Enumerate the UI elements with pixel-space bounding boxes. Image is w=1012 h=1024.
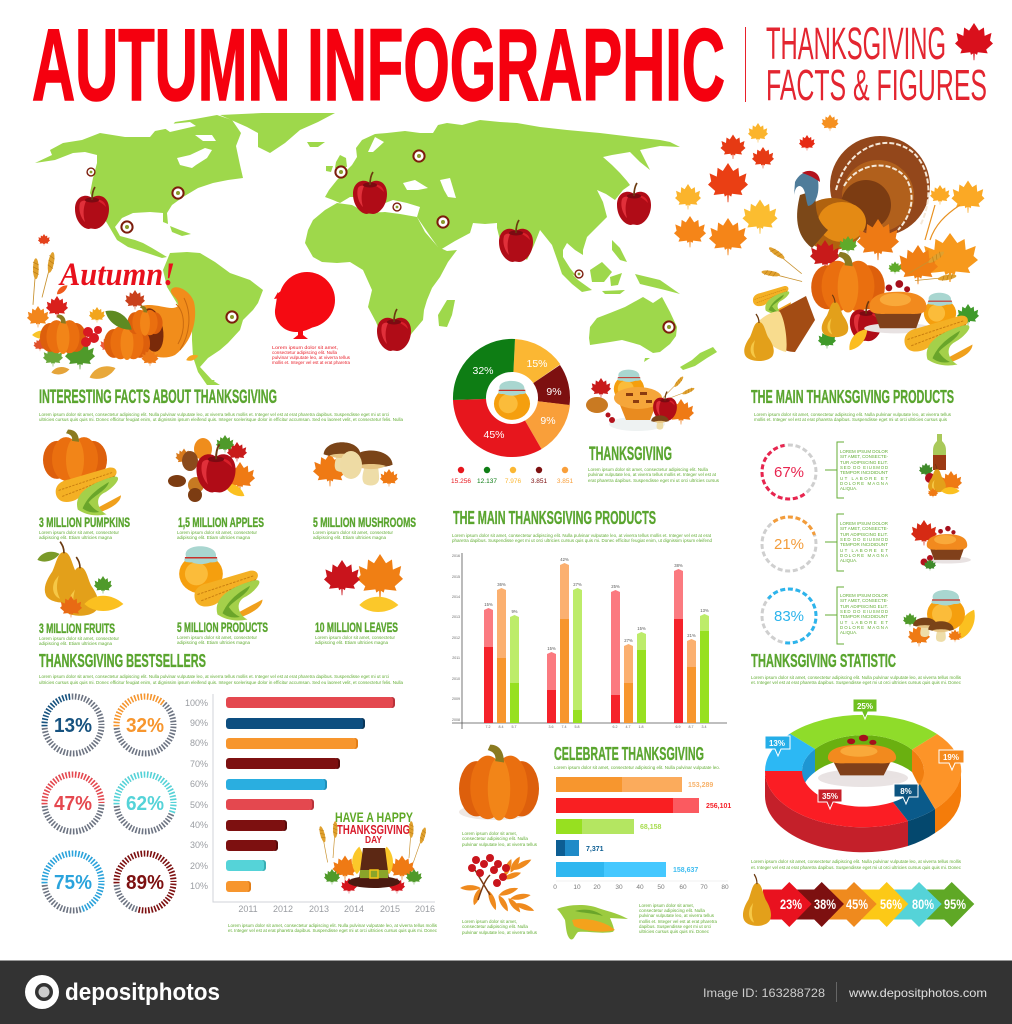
happy thanksgiving badge [318, 809, 427, 894]
celebrate bar chart: 30 [615, 884, 623, 891]
heading: bestsellers [39, 651, 403, 685]
dial 47%: 47% [54, 793, 92, 815]
fact: leaves [315, 554, 403, 645]
vertical bar chart: 2013 [452, 615, 460, 619]
fact: apples: 1,5 MILLION APPLES [178, 515, 264, 530]
subtitle [746, 18, 993, 110]
dial 13% [42, 694, 104, 756]
donut chart [453, 339, 570, 457]
vertical bar chart: 38% [674, 563, 683, 568]
arrow percentage strip: 80% [912, 896, 934, 912]
horizontal bar chart: 30% [190, 840, 208, 850]
arrow percentage strip: 23% [780, 896, 802, 912]
heading: celebrate: Lorem ipsum dolor sit amet, consectetur adipiscing elit. Nulla pulvinar vulputate leo. [554, 765, 720, 770]
autumn cornucopia: Autumn! [58, 257, 175, 293]
product row 83%: LOREM IPSUM DOLOR [840, 593, 888, 598]
callout 13% [765, 736, 790, 756]
fact: mushrooms: Lorem ipsum dolor sit amet, consectetur [313, 530, 393, 535]
fact: fruits [36, 542, 123, 646]
product row 83%: SED DO EIUSMOD [840, 609, 888, 614]
heading: interesting facts: ultricies cursus quis quis mi. Donec efficitur feugiat enim, ut dignissim ipsum eleifend quis. Integer scelerisque dolor in efficitur accumsan. Sed eu laoreet velit, et consectetur felis. Nulla [39, 417, 403, 422]
fact: pumpkins: 3 MILLION PUMPKINS [39, 515, 130, 530]
horizontal bar chart: 70% [190, 759, 208, 769]
callout 25%: 25% [857, 702, 873, 711]
heading: main products right: Lorem ipsum dolor sit amet, consectetur adipiscing elit. Nulla pulvinar vulputate leo, at viverra tellus [754, 412, 952, 417]
happy thanksgiving badge: DAY [365, 835, 382, 846]
heading: statistic: THANKSGIVING STATISTIC [751, 651, 896, 671]
rowan branch [460, 854, 538, 935]
vertical bar chart: 3.6 [548, 725, 554, 729]
fact: mushrooms [313, 442, 416, 540]
heading: main products center [452, 508, 712, 543]
horizontal bar chart: 20% [190, 861, 208, 871]
rowan branch: Lorem ipsum dolor sit amet, [462, 919, 517, 924]
callout 13%: 13% [769, 739, 785, 748]
map note: consectetur adipiscing elit. Nulla [272, 350, 337, 355]
celebrate pumpkin: consectetur adipiscing elit. Nulla [462, 836, 528, 841]
donut legend: 3.851 [557, 478, 574, 485]
callout 8%: 8% [900, 787, 912, 796]
fact: leaves: Lorem ipsum dolor sit amet, consectetur [315, 635, 395, 640]
celebrate bar chart: 7,371 [586, 846, 604, 853]
celebrate bar chart: 80 [721, 884, 729, 891]
arrow percentage strip: 95% [944, 896, 966, 912]
horizontal bar chart: 10% [190, 881, 208, 891]
dial 89%: 89% [126, 872, 164, 894]
product row 21% [751, 506, 971, 582]
rowan branch: consectetur adipiscing elit. Nulla [462, 924, 528, 929]
corn and note: consectetur adipiscing elit. Nulla [639, 908, 705, 913]
corn and note: pulvinar vulputate leo, at viverra tellus [639, 913, 715, 918]
vertical bar chart: 2010 [452, 677, 460, 681]
arrow percentage strip [743, 874, 974, 927]
celebrate pumpkin: pulvinar vulputate leo, at viverra tellus [462, 842, 538, 847]
vertical bar chart: 36% [497, 582, 506, 587]
heading: statistic: et. Integer vel est at erat pharetra dapibus. Suspendisse eget mi ut orci ultricies cursus quis quis mi. Donec [751, 680, 962, 685]
product row 21%: TEMPOR INCIDIDUNT [840, 542, 888, 547]
fact: products: 5 MILLION PRODUCTS [177, 620, 268, 635]
horizontal bar chart [185, 694, 435, 914]
horizontal bar chart: 90% [190, 718, 208, 728]
dial 47% [42, 772, 104, 834]
vertical bar chart: 2015 [452, 575, 460, 579]
vertical bar chart: 7.2 [486, 725, 490, 729]
callout 8% [894, 784, 918, 804]
footer bar: Image ID: 163288728 [703, 986, 825, 1000]
product row 21%: SED DO EIUSMOD [840, 537, 888, 542]
arrow percentage strip: 56% [880, 896, 902, 912]
callout 19%: 19% [943, 753, 959, 762]
callout 19% [939, 750, 964, 770]
fact: leaves: 10 MILLION LEAVES [315, 620, 398, 635]
product row 67%: LOREM IPSUM DOLOR [840, 449, 888, 454]
vertical bar chart: 9% [511, 609, 518, 614]
fact: fruits: Lorem ipsum dolor sit amet, consectetur [39, 636, 119, 641]
celebrate bar chart: 153,289 [688, 782, 713, 789]
product row 83%: UT LABORE ET [840, 620, 888, 625]
dial 62%: 62% [126, 793, 164, 815]
vertical bar chart: 27% [573, 582, 582, 587]
bar chart note [228, 923, 438, 933]
happy thanksgiving badge: HAVE A HAPPY [335, 809, 413, 825]
map note [272, 345, 351, 365]
arrow percentage strip: 45% [846, 896, 868, 912]
vertical bar chart: 13% [700, 608, 709, 613]
dial 75%: 75% [54, 872, 92, 894]
heading: statistic [751, 651, 962, 685]
thanksgiving text: Lorem ipsum dolor sit amet, consectetur adipiscing elit. Nulla [588, 467, 708, 472]
celebrate bar chart: 10 [573, 884, 581, 891]
product row 83%: DOLORE MAGNA [840, 625, 888, 630]
vertical bar chart: 2011 [452, 656, 460, 660]
heading: celebrate: CELEBRATE THANKSGIVING [554, 744, 704, 764]
product row 67%: TEMPOR INCIDIDUNT [840, 470, 888, 475]
map note: mollis et. Integer vel est at erat pharetra [272, 360, 350, 365]
horizontal bar chart: 2011 [238, 904, 258, 914]
product row 83%: TEMPOR INCIDIDUNT [840, 614, 888, 619]
horizontal bar chart: 60% [190, 779, 208, 789]
vertical bar chart: 21% [687, 633, 696, 638]
callout 35% [818, 789, 842, 809]
product row 21%: DOLORE MAGNA [840, 553, 888, 558]
vertical bar chart: 6.9 [676, 725, 680, 729]
heading: main products right: mollis et. Integer vel est at erat pharetra dapibus. Suspendisse eget mi ut orci ultricies cursus quis [754, 417, 948, 422]
celebrate bar chart: 70 [700, 884, 708, 891]
product row 21%: TUR ADIPISCING ELIT. [840, 532, 888, 537]
rowan branch: pulvinar vulputate leo, at viverra tellus [462, 930, 538, 935]
heading: bestsellers: ultricies cursus quis quis mi. Donec efficitur feugiat enim, ut dignissim ipsum eleifend quis. Integer scelerisque dolor in efficitur accumsan. Sed eu laoreet velit, et consectetur felis. Nulla [39, 680, 403, 685]
fact: apples [168, 435, 264, 540]
map targets [87, 150, 675, 333]
vertical bar chart: 25% [611, 584, 620, 589]
vertical bar chart: 2008 [452, 718, 460, 722]
donut legend [451, 467, 574, 485]
product row 21%: 21% [774, 536, 804, 553]
dial 89% [114, 851, 176, 913]
fact: mushrooms: 5 MILLION MUSHROOMS [313, 515, 416, 530]
horizontal bar chart: 2013 [309, 904, 329, 914]
fact: pumpkins [39, 430, 130, 540]
donut chart: 45% [483, 429, 505, 441]
product row 21%: ALIQUA. [840, 558, 857, 563]
fact: products [177, 546, 268, 645]
donut legend: 3.851 [531, 478, 548, 485]
fact: pumpkins: adipiscing elit. Etiam ultricies magna [39, 535, 112, 540]
product row 67%: ALIQUA. [840, 486, 857, 491]
vertical bar chart: 15% [637, 626, 646, 631]
vertical bar chart: 15% [484, 602, 493, 607]
heading: main products center: THE MAIN THANKSGIVING PRODUCTS [453, 508, 656, 528]
product row 67%: 67% [774, 464, 804, 481]
donut legend: 7.976 [505, 478, 522, 485]
product row 67% [751, 434, 962, 510]
product row 83% [751, 578, 979, 654]
vertical bar chart: 5.7 [512, 725, 516, 729]
fact: apples: adipiscing elit. Etiam ultricies magna [177, 535, 250, 540]
heading: main products center: pharetra dapibus. Suspendisse eget mi ut orci ultricies cursus quis quis mi. Donec efficitur feugiat enim, ut dignissim ipsum eleifend [452, 538, 712, 543]
happy thanksgiving badge: THANKSGIVING [337, 822, 410, 837]
heading: main products right [751, 386, 954, 422]
product row 21%: SIT AMET, CONSECTE- [840, 526, 889, 531]
horizontal bar chart: 50% [190, 800, 208, 810]
turkey silhouette [274, 272, 335, 339]
vertical bar chart: 5.8 [574, 725, 580, 729]
bar chart note: Lorem ipsum dolor sit amet, consectetur adipiscing elit. Nulla pulvinar vulputate leo, at viverra tellus mollis [228, 923, 438, 928]
heading: interesting facts: Lorem ipsum dolor sit amet, consectetur adipiscing elit. Nulla pulvinar vulputate leo, at viverra tellus mollis et. Integer vel est at erat pharetra dapibus. Suspendisse eget mi ut orci [39, 412, 389, 417]
3d ring chart [765, 699, 964, 852]
vertical bar chart: 2016 [452, 554, 460, 558]
map note: Lorem ipsum dolor sit amet, [272, 345, 338, 350]
vertical bar chart: 7.4 [562, 725, 566, 729]
celebrate bar chart: 158,637 [673, 867, 698, 874]
dial 13%: 13% [54, 715, 92, 737]
product row 67%: DOLORE MAGNA [840, 481, 888, 486]
thanksgiving pie illustration [586, 370, 695, 431]
celebrate bar chart: 40 [636, 884, 644, 891]
donut chart: 32% [472, 365, 494, 377]
product row 67%: SED DO EIUSMOD [840, 465, 888, 470]
product row 83%: SIT AMET, CONSECTE- [840, 598, 889, 603]
corn and note: dapibus. Suspendisse eget mi ut orci [639, 924, 711, 929]
footer bar [0, 960, 1012, 1024]
thanksgiving turkey scene [674, 114, 984, 365]
donut chart: 15% [526, 358, 548, 370]
percent dials [42, 694, 176, 913]
celebrate bar chart: 60 [679, 884, 687, 891]
horizontal bar chart: 2015 [380, 904, 400, 914]
product row 21%: LOREM IPSUM DOLOR [840, 521, 888, 526]
horizontal bar chart: 2012 [273, 904, 293, 914]
celebrate pumpkin [459, 745, 539, 847]
corn and note: ultricies cursus quis quis mi. Donec [639, 929, 710, 934]
vertical bar chart [452, 553, 727, 729]
thanksgiving text: erat pharetra dapibus. Suspendisse eget mi ut orci ultricies cursus [588, 478, 720, 483]
heading: bestsellers: THANKSGIVING BESTSELLERS [39, 651, 206, 671]
corn and note: Lorem ipsum dolor sit amet, [639, 903, 694, 908]
product row 83%: ALIQUA. [840, 630, 857, 635]
callout 35%: 35% [822, 792, 838, 801]
vertical bar chart: 8.4 [498, 725, 504, 729]
heading: celebrate [554, 744, 720, 770]
product row 67%: TUR ADIPISCING ELIT. [840, 460, 888, 465]
vertical bar chart: 1.8 [638, 725, 644, 729]
corn and note [557, 903, 717, 939]
map apples [75, 172, 651, 351]
vertical bar chart: 27% [624, 638, 633, 643]
donut legend: 15.256 [451, 478, 471, 485]
dial 32% [114, 694, 176, 756]
map note: pulvinar vulputate leo, at viverra tellus [272, 355, 351, 360]
heading: interesting facts [39, 387, 403, 422]
vertical bar chart: 42% [560, 557, 569, 562]
product row 83%: TUR ADIPISCING ELIT. [840, 604, 888, 609]
product row 67%: SIT AMET, CONSECTE- [840, 454, 889, 459]
celebrate bar chart: 0 [553, 884, 557, 891]
heading: main products center: Lorem ipsum dolor sit amet, consectetur adipiscing elit. Nulla pulvinar vulputate leo, at viverra tellus mollis et. Integer vel est at erat [452, 533, 712, 538]
statistic note: et. Integer vel est at erat pharetra dapibus. Suspendisse eget mi ut orci ultricies cursus quis quis mi. Donec [751, 865, 962, 870]
fact: fruits: adipiscing elit. Etiam ultricies magna [39, 641, 112, 646]
bar chart note: et. Integer vel est at erat pharetra dapibus. Suspendisse eget mi ut orci ultricies cursus quis quis mi. Donec [228, 928, 438, 933]
heading: statistic: Lorem ipsum dolor sit amet, consectetur adipiscing elit. Nulla pulvinar vulputate leo, at viverra tellus mollis [751, 675, 962, 680]
dial 62% [114, 772, 176, 834]
vertical bar chart: 6.2 [612, 725, 618, 729]
horizontal bar chart: 2016 [415, 904, 435, 914]
celebrate bar chart: 20 [593, 884, 601, 891]
donut chart: 9% [546, 386, 562, 398]
fact: pumpkins: Lorem ipsum dolor sit amet, consectetur [39, 530, 119, 535]
horizontal bar chart: 80% [190, 738, 208, 748]
vertical bar chart: 8.7 [688, 725, 694, 729]
footer bar: www.depositphotos.com [848, 986, 987, 1000]
product row 21%: UT LABORE ET [840, 548, 888, 553]
vertical bar chart: 15% [547, 646, 556, 651]
world map [35, 113, 717, 385]
fact: products: Lorem ipsum dolor sit amet, consectetur [177, 635, 257, 640]
heading: interesting facts: INTERESTING FACTS ABOUT THANKSGIVING [39, 387, 277, 408]
vertical bar chart: 3.4 [702, 725, 706, 729]
horizontal bar chart: 40% [190, 820, 208, 830]
celebrate bar chart: 256,101 [706, 803, 731, 810]
fact: mushrooms: adipiscing elit. Etiam ultricies magna [313, 535, 386, 540]
dial 32%: 32% [126, 715, 164, 737]
donut chart: 9% [540, 415, 556, 427]
thanksgiving text [588, 444, 720, 483]
celebrate bar chart: 68,158 [640, 824, 662, 831]
vertical bar chart: 4.7 [626, 725, 630, 729]
statistic note [751, 859, 962, 870]
fact: leaves: adipiscing elit. Etiam ultricies magna [315, 640, 388, 645]
celebrate bar chart [553, 777, 731, 891]
product row 67%: UT LABORE ET [840, 476, 888, 481]
vertical bar chart: 2009 [452, 697, 460, 701]
vertical bar chart: 2014 [452, 595, 460, 599]
fact: apples: Lorem ipsum dolor sit amet, consectetur [177, 530, 257, 535]
footer bar: depositphotos [65, 979, 220, 1006]
dial 75% [42, 851, 104, 913]
horizontal bar chart: 100% [185, 698, 208, 708]
statistic note: Lorem ipsum dolor sit amet, consectetur adipiscing elit. Nulla pulvinar vulputate leo, at viverra tellus mollis [751, 859, 962, 864]
fact: fruits: 3 MILLION FRUITS [39, 621, 115, 636]
horizontal bar chart: 2014 [344, 904, 364, 914]
donut legend: 12.137 [477, 478, 497, 485]
heading: bestsellers: Lorem ipsum dolor sit amet, consectetur adipiscing elit. Nulla pulvinar vulputate leo, at viverra tellus mollis et. Integer vel est at erat pharetra dapibus. Suspendisse eget mi ut orci [39, 674, 389, 679]
product row 83%: 83% [774, 608, 804, 625]
vertical bar chart: 2012 [452, 636, 460, 640]
thanksgiving text: pulvinar vulputate leo, at viverra tellus mollis et. Integer vel est at [588, 472, 717, 477]
corn and note: mollis et. Integer vel est at erat pharetra [639, 919, 717, 924]
arrow percentage strip: 38% [814, 896, 836, 912]
celebrate pumpkin: Lorem ipsum dolor sit amet, [462, 831, 517, 836]
celebrate bar chart: 50 [657, 884, 665, 891]
fact: products: adipiscing elit. Etiam ultricies magna [177, 640, 250, 645]
thanksgiving text: THANKSGIVING [589, 444, 672, 465]
autumn cornucopia [27, 234, 199, 382]
callout 25% [853, 699, 877, 719]
